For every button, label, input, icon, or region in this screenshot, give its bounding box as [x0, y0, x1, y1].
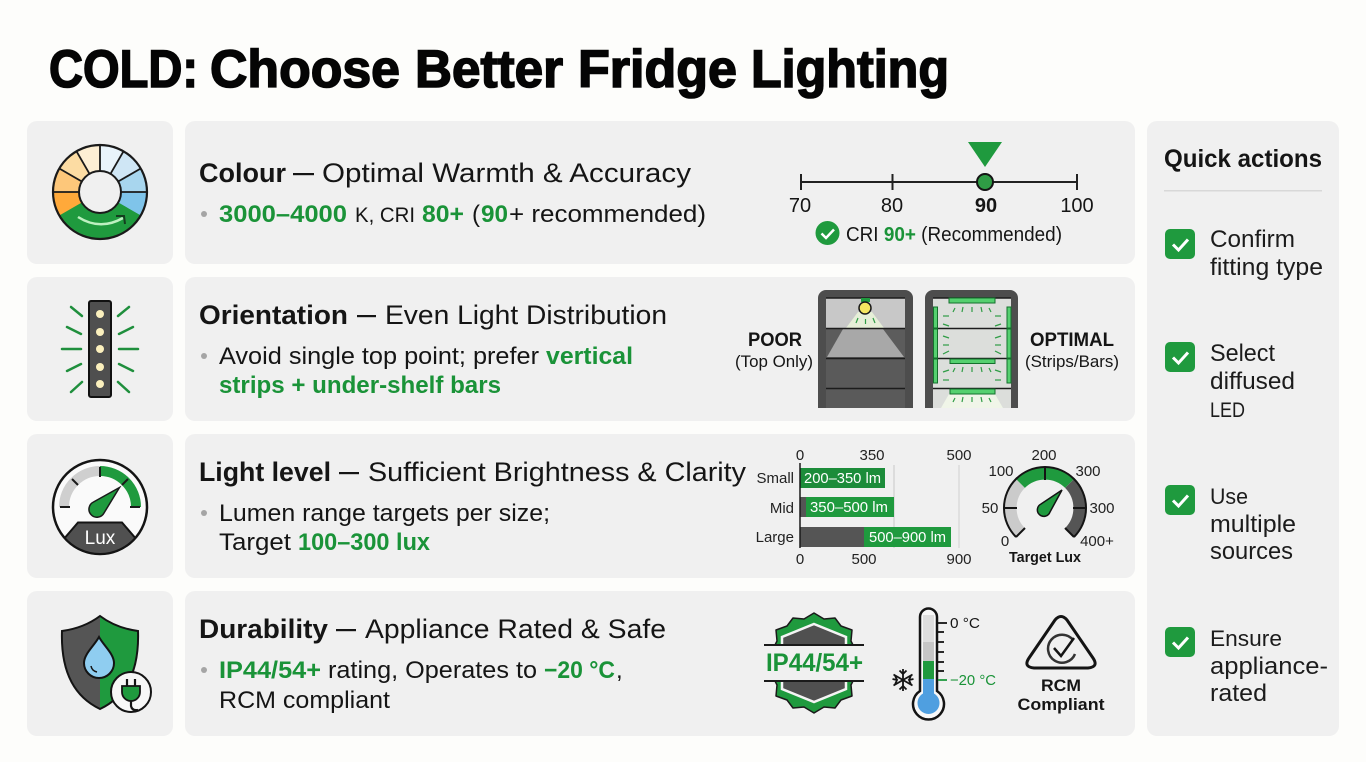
panel: quick actions — [1147, 121, 1339, 736]
heading: orientation: Even Light Distribution — [385, 300, 667, 330]
chart: lumen range bars: 500–900 lm — [869, 529, 946, 546]
bullet text: colour temperature: K, CRI — [355, 203, 415, 227]
action: confirm fitting type — [1165, 226, 1323, 281]
chart: lumen range bars: 500 — [851, 551, 877, 568]
bullet text: ratings: rating, Operates to — [328, 657, 537, 684]
title: Fridge — [578, 40, 737, 99]
icon: thermometer: −20 °C — [950, 672, 996, 689]
chart: lumen range bars: 0 — [796, 447, 804, 464]
action: use multiple sources — [1165, 484, 1296, 565]
action: ensure appliance-rated: appliance- — [1210, 653, 1328, 680]
title — [49, 40, 949, 99]
panel: orientation icon — [27, 277, 173, 421]
label: optimal — [1025, 330, 1119, 371]
bullet text: placement: Avoid single top point; prefer — [219, 343, 539, 370]
bullet text: colour temperature: + recommended) — [509, 201, 706, 228]
bullet text: colour temperature: 3000–4000 — [219, 201, 347, 228]
icon: shield with drop and plug — [62, 616, 151, 712]
heading: colour — [199, 158, 692, 188]
panel: light level icon — [27, 434, 173, 578]
chart: target lux gauge: 50 — [982, 500, 998, 517]
action: select diffused LED: LED — [1210, 399, 1245, 422]
panel: light level — [185, 434, 1135, 578]
heading: colour: Colour — [199, 158, 286, 188]
panel: colour — [185, 121, 1135, 264]
bullet text: colour temperature: ( — [472, 201, 480, 228]
icon: snowflake — [892, 669, 914, 691]
chart: CRI scale: CRI 90+ (Recommended) — [846, 224, 1062, 246]
chart: lumen range bars: 350 — [859, 447, 885, 464]
action: use multiple sources: multiple — [1210, 511, 1296, 538]
heading: quick actions: Quick actions — [1164, 145, 1322, 173]
chart: target lux gauge: 400+ — [1080, 533, 1114, 550]
badge: IP44/54+: IP44/54+ — [766, 649, 863, 677]
icon: RCM compliance mark — [1018, 616, 1105, 714]
chart: lumen range bars: 500 — [946, 447, 972, 464]
bullet text: colour temperature: 80+ — [422, 201, 464, 228]
chart: CRI scale: 80 — [881, 195, 903, 217]
heading: durability — [199, 614, 666, 644]
heading: orientation — [199, 300, 667, 330]
chart: lumen range bars — [756, 447, 972, 568]
panel: orientation — [185, 277, 1135, 421]
bullet text: lumen targets — [201, 500, 550, 556]
heading: durability: Appliance Rated & Safe — [365, 614, 666, 644]
action: select diffused LED: Select — [1210, 340, 1275, 367]
label: optimal: OPTIMAL — [1030, 330, 1114, 351]
chart: target lux gauge: 200 — [1031, 447, 1057, 464]
chart: CRI scale — [789, 142, 1094, 246]
bullet text: ratings: RCM compliant — [219, 687, 390, 714]
chart: lumen range bars: 0 — [796, 551, 804, 568]
label: poor: (Top Only) — [735, 352, 813, 371]
title: Better — [415, 40, 563, 99]
action: use multiple sources: sources — [1210, 538, 1293, 565]
label: poor — [735, 330, 813, 371]
icon: lux gauge — [53, 460, 147, 554]
chart: lumen range bars: 900 — [946, 551, 972, 568]
chart: lumen range bars: 200–350 lm — [804, 470, 881, 487]
diagram: optimal fridge strips and bars — [925, 290, 1018, 408]
chart: target lux gauge: 100 — [988, 463, 1014, 480]
action: select diffused LED — [1165, 340, 1295, 422]
bullet text: ratings: IP44/54+ — [219, 657, 321, 684]
action: confirm fitting type: Confirm — [1210, 226, 1295, 253]
icon: lux gauge: Lux — [85, 528, 116, 549]
bullet text: ratings: −20 °C — [544, 657, 615, 684]
chart: lumen range bars: Mid — [770, 500, 794, 517]
chart: target lux gauge: 0 — [1001, 533, 1009, 550]
bullet text: placement — [201, 343, 633, 399]
bullet text: ratings — [201, 657, 623, 714]
icon: RCM compliance mark: Compliant — [1018, 695, 1105, 714]
chart: lumen range bars: Large — [756, 529, 794, 546]
heading: durability: Durability — [199, 614, 328, 644]
panel: durability icon — [27, 591, 173, 736]
bullet text: ratings: , — [616, 657, 623, 684]
heading: light level: Sufficient Brightness & Clarity — [368, 457, 747, 487]
bullet text: colour temperature: 90 — [481, 201, 508, 228]
title: COLD: — [49, 40, 198, 99]
label: poor: POOR — [748, 330, 802, 351]
icon: thermometer — [892, 608, 996, 719]
bullet text: placement: vertical — [546, 343, 633, 370]
action: confirm fitting type: fitting type — [1210, 254, 1323, 281]
action: use multiple sources: Use — [1210, 484, 1248, 509]
chart: target lux gauge: 300 — [1075, 463, 1101, 480]
chart: lumen range bars: Small — [756, 470, 794, 487]
action: ensure appliance-rated: Ensure — [1210, 626, 1282, 651]
chart: CRI scale: 100 — [1060, 195, 1094, 217]
action: select diffused LED: diffused — [1210, 368, 1295, 395]
bullet text: colour temperature — [201, 201, 706, 228]
heading: orientation: Orientation — [199, 300, 348, 330]
title: Lighting — [751, 40, 949, 99]
title: Choose — [210, 40, 400, 99]
icon: RCM compliance mark: RCM — [1041, 676, 1081, 695]
icon: thermometer: 0 °C — [950, 615, 980, 632]
label: optimal: (Strips/Bars) — [1025, 352, 1119, 371]
chart: target lux gauge — [982, 447, 1115, 566]
chart: CRI scale: 70 — [789, 195, 811, 217]
chart: target lux gauge: Target Lux — [1009, 549, 1082, 566]
chart: target lux gauge: 300 — [1089, 500, 1115, 517]
chart: CRI scale: 90 — [975, 195, 997, 217]
bullet text: lumen targets: Target — [219, 529, 291, 556]
heading: light level — [199, 457, 747, 487]
heading: light level: Light level — [199, 457, 331, 487]
action: ensure appliance-rated — [1165, 626, 1328, 707]
chart: lumen range bars: 350–500 lm — [810, 499, 888, 516]
bullet text: placement: strips + under-shelf bars — [219, 372, 501, 399]
panel: colour icon — [27, 121, 173, 264]
action: ensure appliance-rated: rated — [1210, 680, 1267, 707]
diagram: poor fridge top light only — [818, 290, 913, 408]
icon: LED strip — [62, 301, 138, 397]
bullet text: lumen targets: Lumen range targets per size; — [219, 500, 550, 527]
bullet text: lumen targets: 100–300 lux — [298, 529, 431, 556]
panel: durability — [185, 591, 1135, 736]
badge: IP44/54+ — [764, 613, 864, 713]
icon: colour wheel — [53, 145, 147, 239]
heading: colour: Optimal Warmth & Accuracy — [322, 158, 692, 188]
